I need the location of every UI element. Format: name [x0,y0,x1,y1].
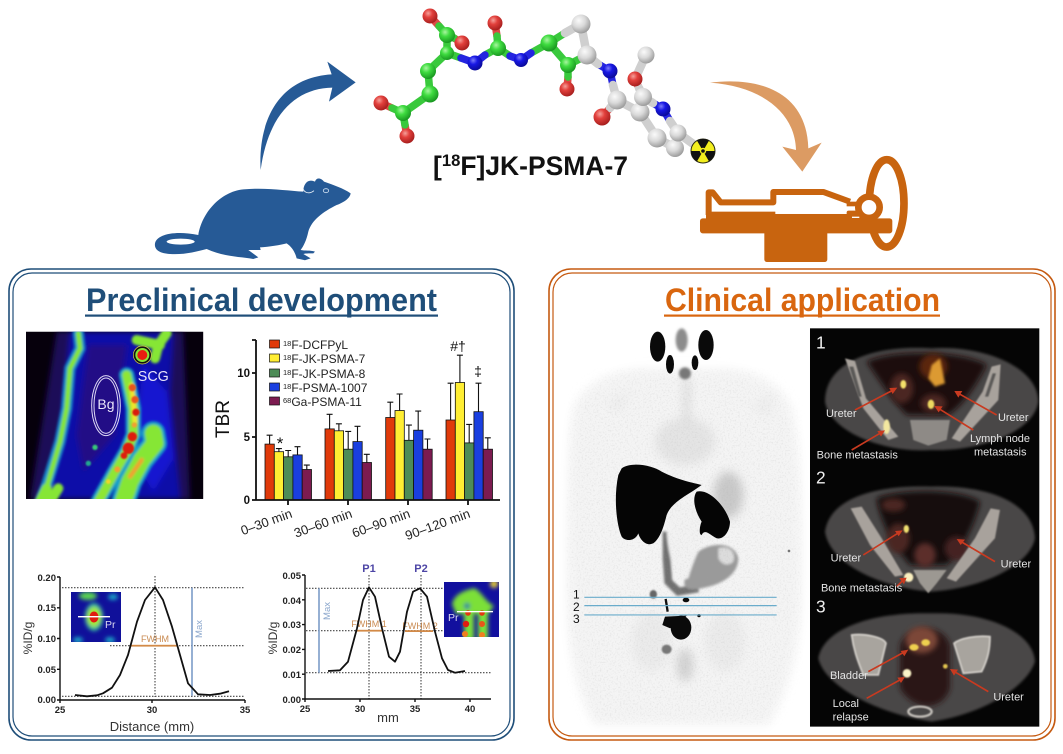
y tick labels: 0.04 [282,596,302,607]
Max bar: Max [322,602,333,620]
axes [302,575,491,702]
x tick labels: 60–90 min [350,506,412,541]
arrow: tracer to patient [710,81,822,172]
axis titles [21,622,194,734]
y tick labels: 0.00 [282,695,301,706]
annotation labels [817,408,1032,723]
significance marks: #† [450,338,466,354]
y tick labels: 0.15 [38,603,57,614]
x tick labels: 40 [465,704,475,715]
y tick labels: 0.20 [38,573,56,584]
axis titles: Distance (mm) [110,719,194,734]
y tick labels: 0.05 [38,665,57,676]
annotation labels: Local [833,698,859,710]
axis titles: %ID/g [21,622,35,654]
y tick labels: 0.00 [38,695,56,706]
panel: clinical application [549,269,1055,740]
bars: green JK-PSMA-8 [284,440,474,500]
PET image: SCG and background region: Bg [97,396,115,412]
annotation labels: Bone metastasis [817,449,898,461]
peak labels: P1 [362,563,376,575]
slice numbers [816,332,826,616]
annotation labels: Ureter [1001,559,1032,571]
slice numbers: 3 [816,596,826,616]
x tick labels: 30 [355,704,365,715]
arrow: mouse to tracer [260,62,356,170]
image speckle [567,368,802,725]
x tick labels: 30 [147,705,157,716]
bars: red DCFPyL [265,418,455,500]
x tick labels [239,506,472,543]
slice 1 [825,348,1038,450]
icon: radiation symbol [691,139,715,163]
Max bar: Max [194,620,205,638]
y tick labels [237,368,251,507]
y tick labels: 0.10 [38,634,56,645]
peak labels [362,563,428,575]
inset: PET two columns [444,580,499,640]
y tick labels: 5 [244,432,251,444]
annotation labels: relapse [833,711,869,723]
PET image: SCG and background region [26,332,203,502]
kidney [694,491,730,539]
error bars [267,355,491,470]
legend: 18 [283,368,291,377]
heading: preclinical development: Preclinical development [86,282,437,318]
bars: blue PSMA-1007 [293,412,483,500]
axis titles: %ID/g [266,622,280,654]
annotation labels: Lymph node [970,433,1030,445]
body silhouette [567,368,802,725]
inset: PET two columns: Pr [448,612,459,624]
FWHM bars: FWHM 1 [351,619,387,629]
Max bar [318,588,333,673]
x tick labels [55,705,251,716]
legend: 18 [283,353,291,362]
slice labels: 1 [573,587,580,601]
annotation labels: Ureter [993,691,1024,703]
molecule name: 18 [442,151,460,170]
y tick labels: 0.05 [282,571,302,582]
PET/CT axial slices [810,328,1039,727]
y tick labels [282,571,302,706]
inset: PET spot [71,592,121,643]
x tick labels: 25 [55,705,66,716]
legend: F-PSMA-1007 [291,381,368,395]
legend: 18 [283,339,291,348]
slice lines [584,597,777,615]
y tick labels: 0 [244,495,250,507]
FWHM bars [351,619,438,632]
slice 2 [825,487,1035,593]
x tick labels: 90–120 min [403,506,472,543]
x tick labels [300,704,475,715]
significance marks [277,338,482,453]
x tick labels: 35 [240,705,251,716]
annotation labels: Ureter [831,553,862,565]
slice numbers: 2 [816,468,826,488]
icon: mouse [155,178,351,260]
annotation labels: metastasis [974,446,1027,458]
y tick labels [38,573,57,706]
bar chart: TBR by time [213,338,500,543]
y axis title: TBR [213,400,234,438]
axes [57,577,245,703]
curve [75,587,229,696]
y tick labels: 0.01 [282,670,302,681]
axis titles: mm [377,710,399,725]
significance marks: * [277,434,284,453]
annotation labels: Bladder [830,670,868,682]
bowel uptake [667,504,738,592]
bars: maroon PSMA-11 [302,449,492,500]
legend: F-JK-PSMA-7 [291,352,366,366]
slice labels [573,587,580,626]
line plot: single peak profile [21,573,251,734]
x tick labels: 30–60 min [292,506,354,541]
lesions and bladder [650,550,790,654]
torso uptake shading [605,378,775,682]
slice labels: 3 [573,612,580,626]
axes [252,340,500,505]
y tick labels: 0.03 [282,620,301,631]
inset: PET spot: Pr [105,619,116,631]
guide lines [62,576,245,697]
molecule: tracer ball and stick model [374,8,703,157]
PET image: SCG and background region: SCG [138,369,169,385]
molecule name: [ [433,151,442,181]
annotation arrows [852,388,997,698]
molecule name: F]JK-PSMA-7 [460,151,628,181]
y tick labels: 0.02 [282,645,301,656]
axis titles [266,622,399,725]
salivary glands [650,328,714,379]
PET maximum intensity projection [567,328,802,725]
annotation labels: Ureter [826,408,857,420]
x tick labels: 0–30 min [239,506,294,538]
panel: preclinical development [9,269,514,740]
slice 3 [818,613,1035,722]
peak labels: P2 [414,563,428,575]
liver [616,465,702,544]
bars: yellow JK-PSMA-7 [274,382,465,500]
curve [328,587,465,673]
icon: patient in PET scanner [700,160,904,262]
legend [270,338,368,409]
x tick labels: 35 [410,704,421,715]
heading: clinical application: Clinical application [665,282,940,318]
FWHM bar: FWHM [141,634,169,644]
slice labels: 2 [573,600,580,614]
y tick labels: 10 [237,368,250,380]
legend: 18 [283,382,291,391]
annotation labels: Bone metastasis [821,583,903,595]
legend: 68 [283,396,291,405]
significance marks: ‡ [474,363,482,379]
slice numbers: 1 [816,332,826,352]
guide lines [306,575,491,699]
annotation labels: Ureter [998,412,1029,424]
x tick labels: 25 [300,704,311,715]
legend: F-JK-PSMA-8 [291,367,366,381]
Max bar [191,588,205,696]
FWHM bar [130,634,177,647]
line plot: double peak profile [266,563,499,725]
FWHM bars: FWHM 2 [402,621,438,631]
legend: Ga-PSMA-11 [291,395,362,409]
legend: F-DCFPyL [291,338,348,352]
